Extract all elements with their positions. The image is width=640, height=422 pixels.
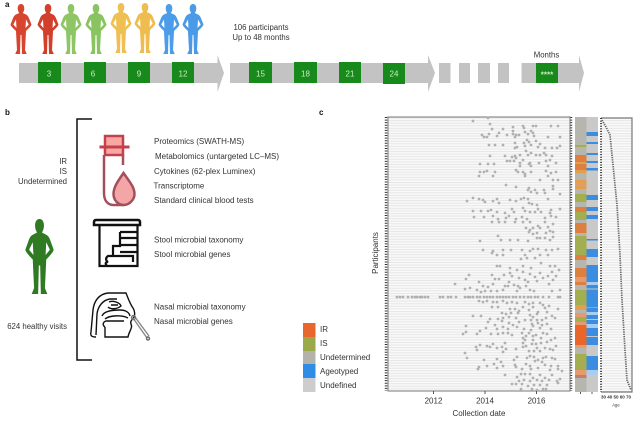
- timeline: break segments and final month arrow: ****: [541, 70, 554, 80]
- timeline: months 3 to 12: 9: [137, 70, 142, 78]
- x axis: Collection date: [453, 409, 506, 418]
- panel label c: c: [319, 108, 324, 117]
- timeline: months 3 to 12: 12: [179, 70, 188, 78]
- icon: nasal cavity and swab: [91, 293, 150, 340]
- blood assay list: [154, 137, 279, 205]
- bracket: [77, 119, 92, 360]
- stool assay list: [154, 236, 243, 259]
- stool assay list: Stool microbial taxonomy: [154, 236, 243, 244]
- age panel: [601, 118, 632, 408]
- legend: IR: [320, 325, 328, 334]
- age panel: 30 40 50 60 70: [601, 394, 632, 400]
- blood assay list: Metabolomics (untargeted LC–MS): [155, 152, 279, 161]
- classification labels: Undetermined: [18, 177, 67, 186]
- classification labels: [18, 157, 67, 186]
- timeline: months 15 to 24: 15: [256, 70, 265, 78]
- x axis: 2012: [425, 396, 443, 406]
- scatter plot of collection dates: [386, 117, 571, 391]
- x axis: 2016: [528, 396, 546, 406]
- study description: [232, 23, 290, 42]
- timeline: months 15 to 24: [230, 55, 435, 92]
- blood assay list: Proteomics (SWATH-MS): [154, 137, 245, 146]
- classification labels: IS: [60, 167, 67, 176]
- timeline: break segments and final month arrow: [439, 55, 584, 92]
- legend: Undetermined: [320, 353, 370, 362]
- months label: Months: [534, 50, 559, 60]
- legend: Ageotyped: [320, 367, 358, 376]
- nasal assay list: Nasal microbial genes: [154, 317, 233, 326]
- timeline: months 15 to 24: 21: [346, 70, 355, 78]
- study description: Up to 48 months: [232, 33, 290, 42]
- blood assay list: Standard clinical blood tests: [154, 196, 254, 205]
- healthy visits label: 624 healthy visits: [7, 322, 67, 331]
- x axis: [425, 391, 546, 418]
- nasal assay list: [154, 302, 246, 326]
- panel label b: b: [5, 108, 10, 117]
- legend: Undefined: [320, 381, 356, 390]
- x axis: 2014: [476, 396, 494, 406]
- timeline: months 3 to 12: 3: [47, 70, 52, 78]
- classification strip: [575, 117, 598, 394]
- blood assay list: Cytokines (62-plex Luminex): [154, 167, 256, 176]
- classification labels: IR: [59, 157, 67, 166]
- timeline: months 3 to 12: [19, 55, 224, 92]
- study description: 106 participants: [233, 23, 289, 32]
- legend: [303, 323, 370, 392]
- panel label a: a: [5, 0, 10, 9]
- icon: healthy person: [25, 219, 54, 294]
- icon: blood tube and drop: [100, 136, 134, 205]
- legend: IS: [320, 339, 328, 348]
- nasal assay list: Nasal microbial taxonomy: [154, 302, 246, 312]
- timeline: months 15 to 24: 24: [390, 70, 399, 78]
- timeline: months 15 to 24: 18: [301, 70, 310, 78]
- blood assay list: Transcriptome: [154, 182, 205, 190]
- icon: stool sample container: [94, 220, 140, 266]
- participant figures: [10, 3, 204, 54]
- age panel: Age: [612, 402, 620, 408]
- stool assay list: Stool microbial genes: [154, 250, 230, 259]
- y axis title: Participants: [371, 232, 380, 274]
- timeline: months 3 to 12: 6: [91, 70, 96, 78]
